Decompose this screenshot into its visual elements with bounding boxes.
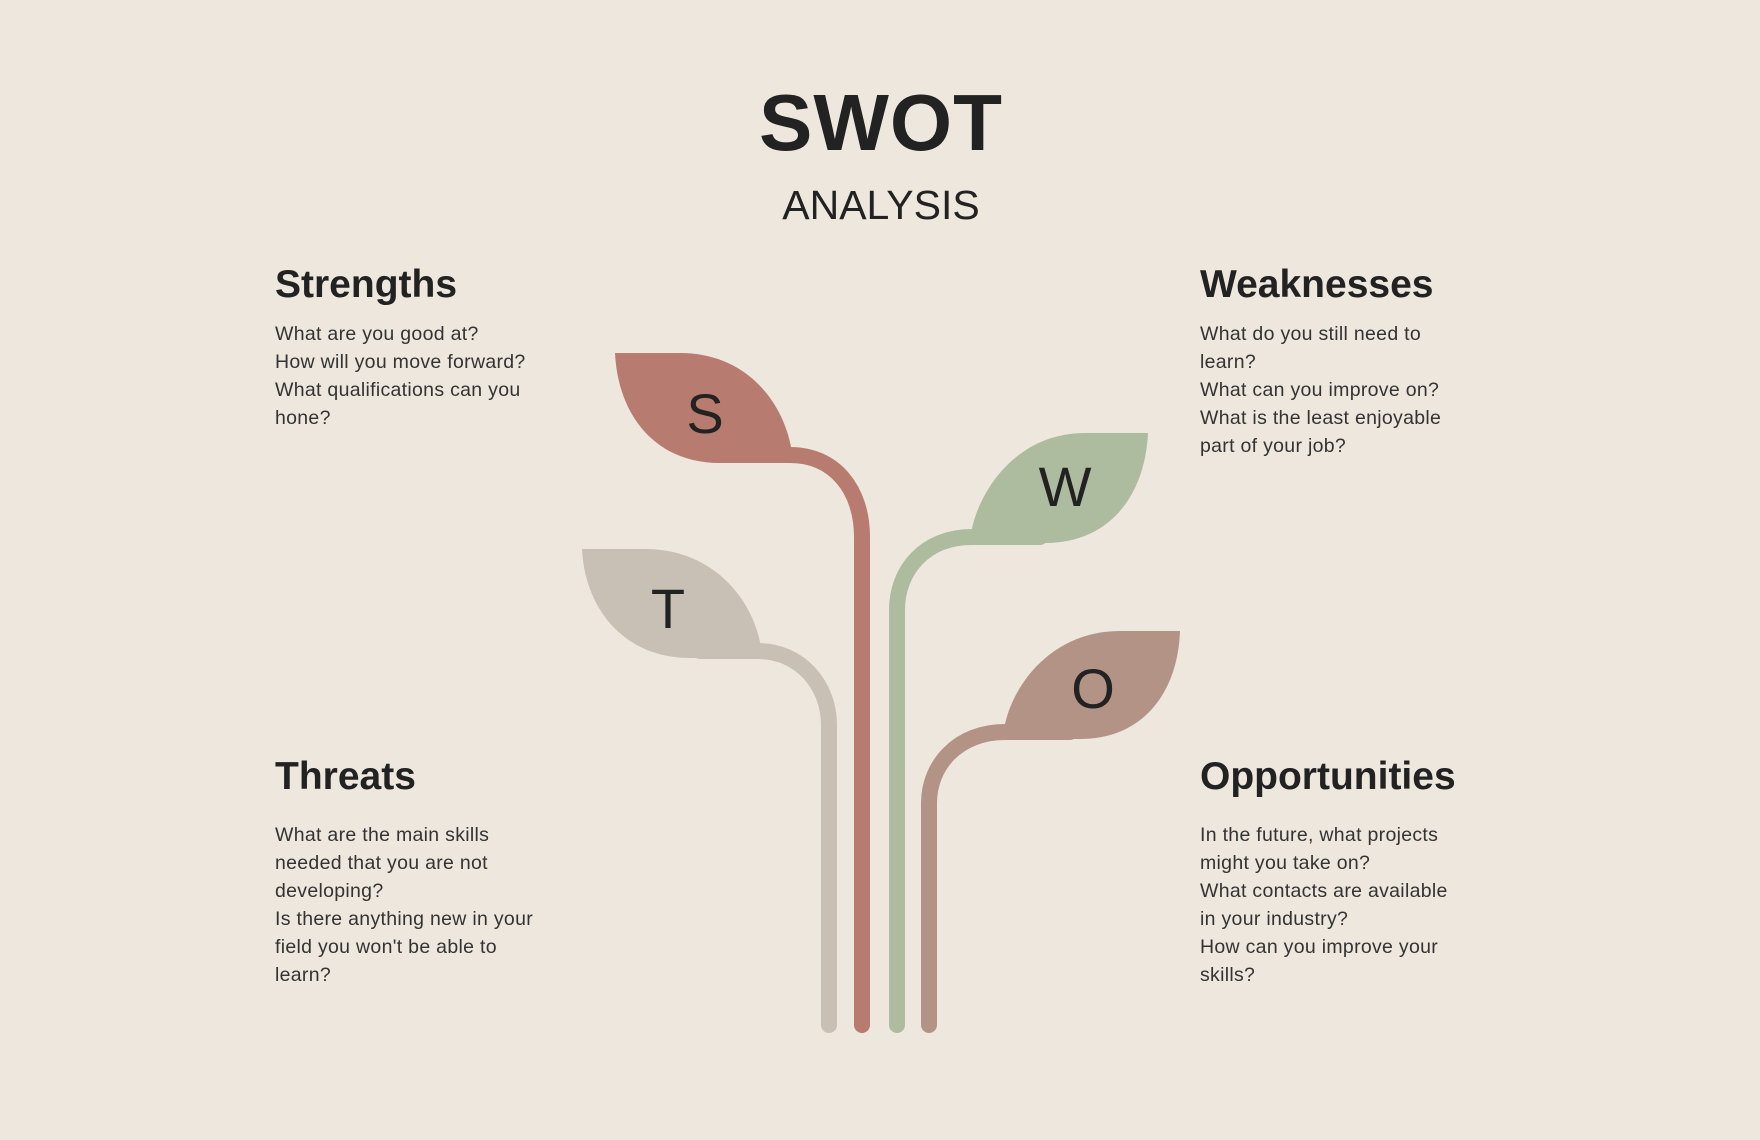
- text: threats: needed that you are not: [275, 852, 488, 874]
- text: threats: field you won't be able to: [275, 936, 497, 958]
- text: weaknesses: What do you still need to: [1200, 323, 1421, 345]
- text: weaknesses: What can you improve on?: [1200, 379, 1439, 401]
- text: threats: [275, 824, 533, 986]
- text: opportunities: What contacts are available: [1200, 880, 1448, 902]
- text: opportunities: How can you improve your: [1200, 936, 1438, 958]
- letter S: S: [686, 382, 724, 445]
- text: weaknesses: learn?: [1200, 351, 1256, 373]
- title: SWOT: [759, 78, 1003, 167]
- stem and leaf: W: [897, 433, 1148, 1025]
- text: threats: Is there anything new in your: [275, 908, 533, 930]
- text: threats: What are the main skills: [275, 824, 489, 846]
- text: opportunities: skills?: [1200, 964, 1255, 986]
- text: strengths: [275, 323, 526, 429]
- text: threats: learn?: [275, 964, 331, 986]
- text: strengths: What are you good at?: [275, 323, 479, 345]
- text: weaknesses: [1200, 323, 1441, 457]
- heading: threats: Threats: [275, 755, 416, 798]
- stem and leaf: S: [615, 353, 862, 1025]
- letter O: O: [1071, 657, 1115, 720]
- text: strengths: What qualifications can you: [275, 379, 520, 401]
- letter W: W: [1039, 455, 1092, 518]
- text: weaknesses: What is the least enjoyable: [1200, 407, 1441, 429]
- text: opportunities: [1200, 824, 1448, 986]
- letter T: T: [651, 577, 685, 640]
- text: threats: developing?: [275, 880, 383, 902]
- text: opportunities: In the future, what projects: [1200, 824, 1438, 846]
- subtitle: ANALYSIS: [782, 182, 980, 228]
- stem and leaf: T: [582, 549, 829, 1025]
- text: weaknesses: part of your job?: [1200, 435, 1346, 457]
- heading: strengths: Strengths: [275, 263, 457, 306]
- text: strengths: How will you move forward?: [275, 351, 526, 373]
- text: opportunities: in your industry?: [1200, 908, 1348, 930]
- heading: weaknesses: Weaknesses: [1200, 263, 1433, 306]
- text: opportunities: might you take on?: [1200, 852, 1370, 874]
- text: strengths: hone?: [275, 407, 331, 429]
- stem and leaf: O: [929, 631, 1180, 1025]
- heading: opportunities: Opportunities: [1200, 755, 1456, 798]
